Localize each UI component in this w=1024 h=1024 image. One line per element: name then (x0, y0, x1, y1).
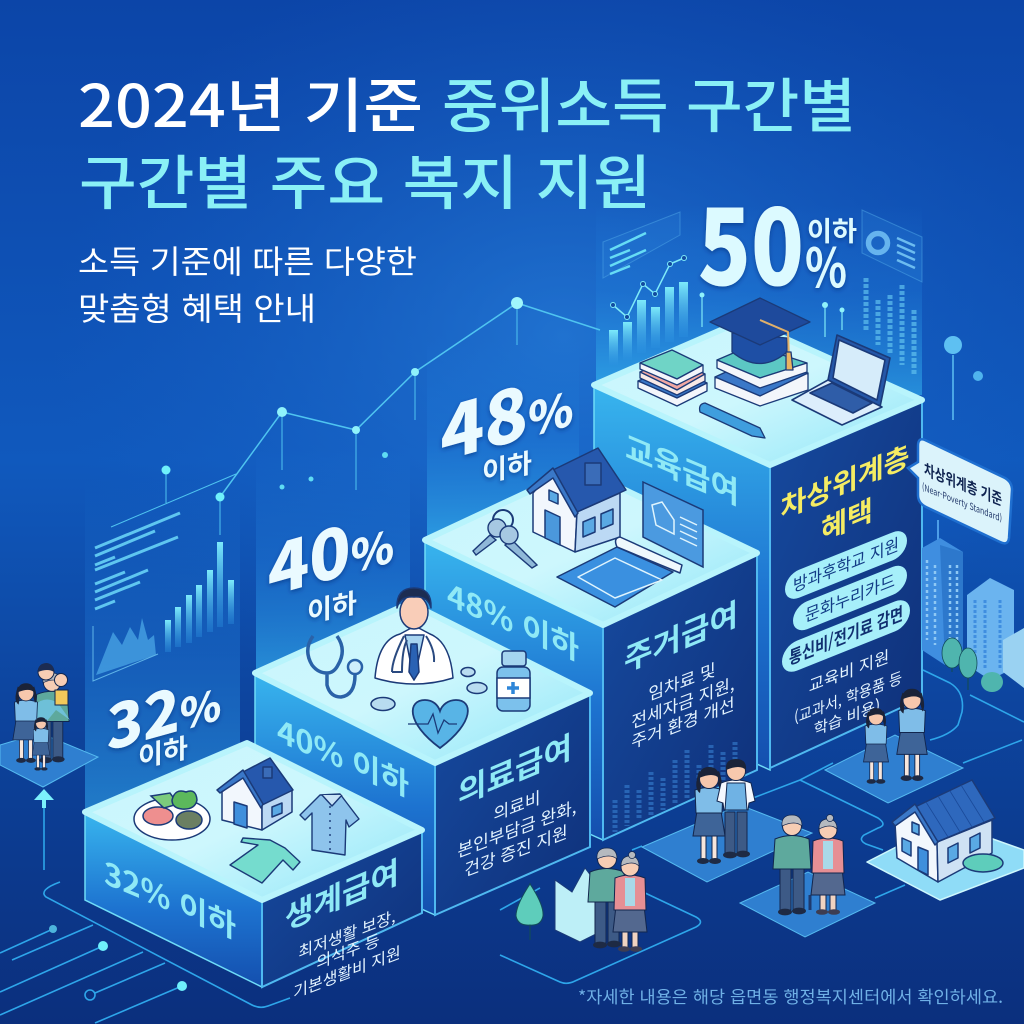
house on right platform (867, 780, 1024, 900)
icon: doctor (375, 588, 453, 684)
text: 32% left face: 32% 이하 (104, 848, 236, 948)
right face (770, 400, 922, 768)
text: medical benefit (458, 722, 576, 882)
icon: house on 32% (217, 758, 293, 830)
icon: heart (408, 700, 468, 748)
big label: 50%: % (805, 224, 847, 303)
text: medical benefit: 본인부담금 완화, (458, 794, 576, 863)
icon: graduation cap and books (710, 298, 810, 406)
chart: list lines, area and bars at 32% (93, 513, 234, 681)
education cost text (794, 642, 902, 740)
text: 40% left face: 40% 이하 (277, 706, 409, 806)
left face: 교육급여 (625, 422, 739, 515)
benefit pills: 문화누리카드 (805, 568, 895, 628)
callout: near-poverty standard (908, 439, 1012, 543)
title: 구간별 주요 복지 지원 (79, 136, 651, 221)
text: medical benefit: 건강 증진 지원 (464, 819, 568, 882)
stacked block: 48% housing (425, 468, 757, 840)
arrow up to family (34, 789, 54, 808)
icon: books left (638, 350, 707, 406)
subtitle: 맞춤형 혜택 안내 (78, 284, 316, 330)
elderly couple on platform (740, 814, 875, 937)
icon: food plate (134, 791, 210, 840)
icon: t-shirt (230, 838, 300, 883)
big label: 32%: 32% (107, 649, 221, 769)
text: housing benefit: 임차료 및 (648, 657, 716, 707)
title (78, 59, 856, 221)
text: livelihood benefit: 생계급여 (285, 847, 399, 940)
text: livelihood benefit: 기본생활비 지원 (293, 939, 401, 1003)
text: medical benefit: 의료급여 (458, 722, 572, 815)
stacked block: 32% livelihood (85, 743, 422, 1003)
text: livelihood benefit (285, 847, 401, 1003)
icon: keys (473, 510, 537, 568)
footnote: *자세한 내용은 해당 읍면동 행정복지센터에서 확인하세요. (578, 983, 1003, 1008)
education cost text: (교과서, 학용품 등 (794, 664, 902, 728)
text: medical benefit: 의료비 (494, 785, 540, 827)
stacked block: 50% education (594, 320, 922, 770)
icon: pen (700, 403, 765, 438)
title: 중위소득 구간별 (442, 59, 856, 144)
near-poverty heading: 차상위계층 (781, 433, 909, 528)
stacked block: 40% medical (255, 603, 590, 915)
icon: tree and elderly with house (516, 848, 647, 952)
benefit pills: 방과후학교 지원 (793, 532, 899, 598)
benefit pills (782, 527, 910, 677)
icon: laptop (792, 335, 890, 425)
big label: 48%: 이하 (482, 440, 532, 490)
subtitle (78, 237, 417, 330)
title: 2024년 기준 (78, 59, 423, 144)
text: housing benefit: 주거급여 (624, 589, 738, 682)
education cost text: 교육비 지원 (809, 642, 889, 697)
icon: stethoscope (308, 636, 362, 697)
glass panels behind blocks (85, 205, 922, 860)
big label: 40%: 40% (268, 483, 394, 616)
students with backpack (825, 689, 963, 803)
icon: house on 48% (527, 448, 626, 552)
equalizer decoration (615, 742, 735, 832)
icon: medicine and pills (371, 651, 530, 711)
icon: home plan card (643, 482, 703, 567)
big label: 40%: 이하 (307, 580, 357, 630)
text: housing benefit: 전세자금 지원, (631, 671, 735, 734)
education cost text: 학습 비용) (814, 692, 880, 740)
circuit lines (0, 670, 1024, 1023)
big label: 50%: 이하 (807, 210, 857, 249)
text: 48% left face: 48% 이하 (447, 570, 579, 670)
top face (594, 320, 922, 465)
big label: 50%: 50 (698, 164, 804, 315)
text: livelihood benefit: 최저생활 보장, (298, 903, 396, 963)
students on platform (642, 759, 812, 882)
text: livelihood benefit: 의식주 등 (316, 927, 380, 974)
city buildings (922, 520, 1024, 692)
text: housing benefit: 주거 환경 개선 (631, 691, 735, 754)
icon: blueprint (557, 537, 682, 607)
big label: 48%: 48% (440, 342, 574, 483)
subtitle: 소득 기준에 따른 다양한 (78, 237, 417, 283)
big label: 32%: 이하 (138, 725, 188, 775)
rising trend line (111, 297, 983, 535)
family on platform (0, 663, 98, 787)
icon: shirt (300, 794, 359, 855)
chart: 50% panel (603, 210, 922, 375)
left face (594, 385, 770, 770)
near-poverty heading: 혜택 (821, 488, 873, 549)
benefit pills: 통신비/전기료 감면 (789, 599, 903, 671)
text: housing benefit (624, 589, 738, 754)
